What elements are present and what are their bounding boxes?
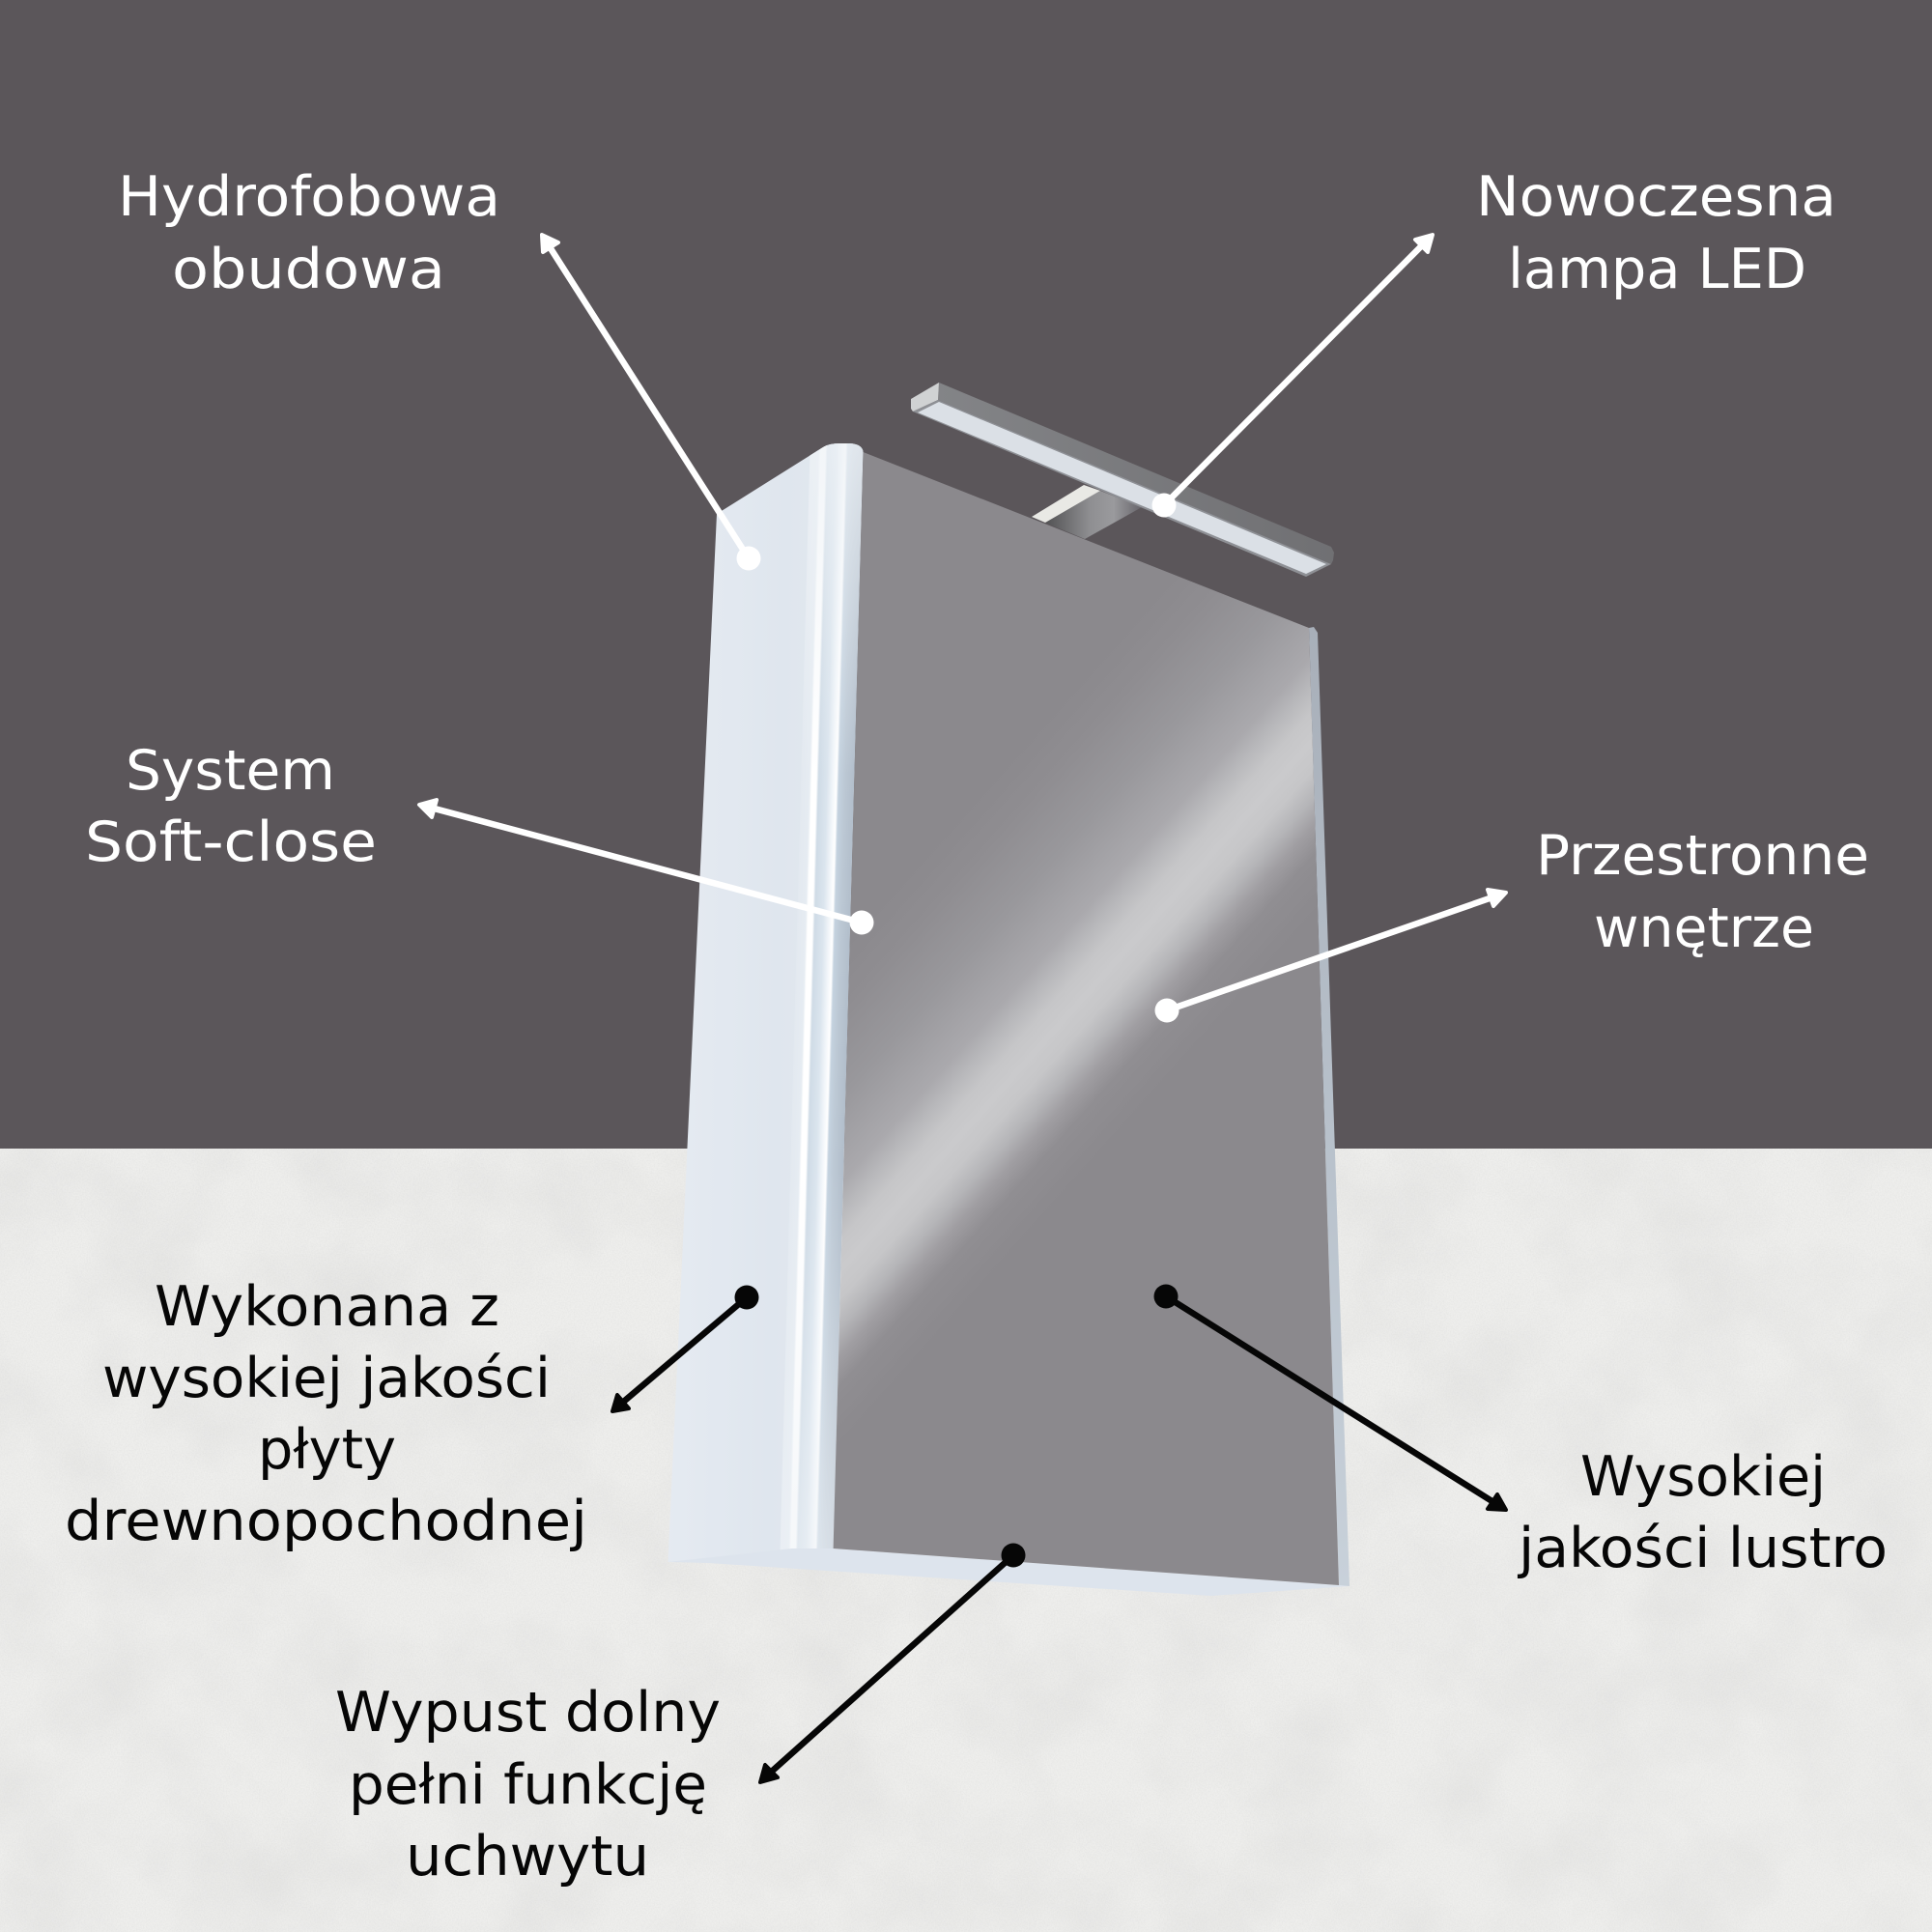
label: Wykonana z wysokiej jakości płyty drewnopochodnej: Wykonana z xyxy=(155,1275,499,1339)
label: Wykonana z wysokiej jakości płyty drewnopochodnej: wysokiej jakości xyxy=(102,1347,551,1410)
label: System Soft-close: System xyxy=(126,739,335,803)
label: Przestronne wnętrze: Przestronne xyxy=(1536,824,1869,888)
label: Nowoczesna lampa LED: lampa LED xyxy=(1508,238,1806,301)
background: dark upper wall xyxy=(0,0,1932,1149)
label: System Soft-close xyxy=(85,739,377,874)
label: Wypust dolny pełni funkcję uchwytu: pełni funkcję xyxy=(349,1753,707,1817)
arrow: Wykonana z wysokiej jakości płyty xyxy=(612,1285,759,1411)
label: Wypust dolny pełni funkcję uchwytu: uchwytu xyxy=(406,1825,649,1889)
label: Nowoczesna lampa LED: Nowoczesna xyxy=(1476,165,1836,229)
lamp lower edge xyxy=(913,400,1331,577)
label: Przestronne wnętrze xyxy=(1536,824,1869,960)
label: Hydrofobowa obudowa: Hydrofobowa xyxy=(118,165,500,229)
label: Hydrofobowa obudowa: obudowa xyxy=(172,238,445,301)
illustration: LED lamp xyxy=(911,383,1334,577)
lamp bracket xyxy=(1032,485,1142,539)
label: Wykonana z wysokiej jakości płyty drewnopochodnej: płyty xyxy=(258,1418,396,1482)
label: Przestronne wnętrze: wnętrze xyxy=(1594,896,1814,960)
label: System Soft-close: Soft-close xyxy=(85,810,377,874)
cabinet bottom lip xyxy=(668,1548,1350,1596)
label: Wysokiej jakości lustro xyxy=(1517,1445,1888,1580)
door right edge xyxy=(1309,627,1350,1586)
cabinet rounded edge strip xyxy=(780,440,864,1560)
arrow: Wysokiej jakości lustro xyxy=(1153,1285,1506,1510)
label: Wykonana z wysokiej jakości płyty drewnopochodnej: drewnopochodnej xyxy=(65,1490,587,1553)
label: Wypust dolny pełni funkcję uchwytu xyxy=(335,1681,721,1889)
lamp top face xyxy=(938,383,1334,564)
arrow: System Soft-close xyxy=(419,800,873,935)
arrow: Przestronne wnętrze xyxy=(1155,890,1506,1022)
arrow: Nowoczesna lampa LED xyxy=(1151,235,1433,518)
label: Wykonana z wysokiej jakości płyty drewnopochodnej xyxy=(65,1275,587,1553)
arrow: Wypust dolny xyxy=(760,1544,1026,1782)
label: Wypust dolny pełni funkcję uchwytu: Wypust dolny xyxy=(335,1681,721,1745)
label: Wysokiej jakości lustro: Wysokiej xyxy=(1580,1445,1826,1509)
background: light concrete floor xyxy=(0,1149,1932,1932)
label: Hydrofobowa obudowa xyxy=(118,165,500,301)
illustration: mirror cabinet xyxy=(668,440,1350,1596)
lamp light face xyxy=(918,402,1326,574)
label: Nowoczesna lampa LED xyxy=(1476,165,1836,301)
lamp end cap xyxy=(911,383,939,412)
mirror door xyxy=(834,452,1339,1585)
arrow: Hydrofobowa obudowa xyxy=(542,235,761,570)
label: Wysokiej jakości lustro: jakości lustro xyxy=(1517,1517,1888,1580)
cabinet side panel xyxy=(668,443,864,1562)
